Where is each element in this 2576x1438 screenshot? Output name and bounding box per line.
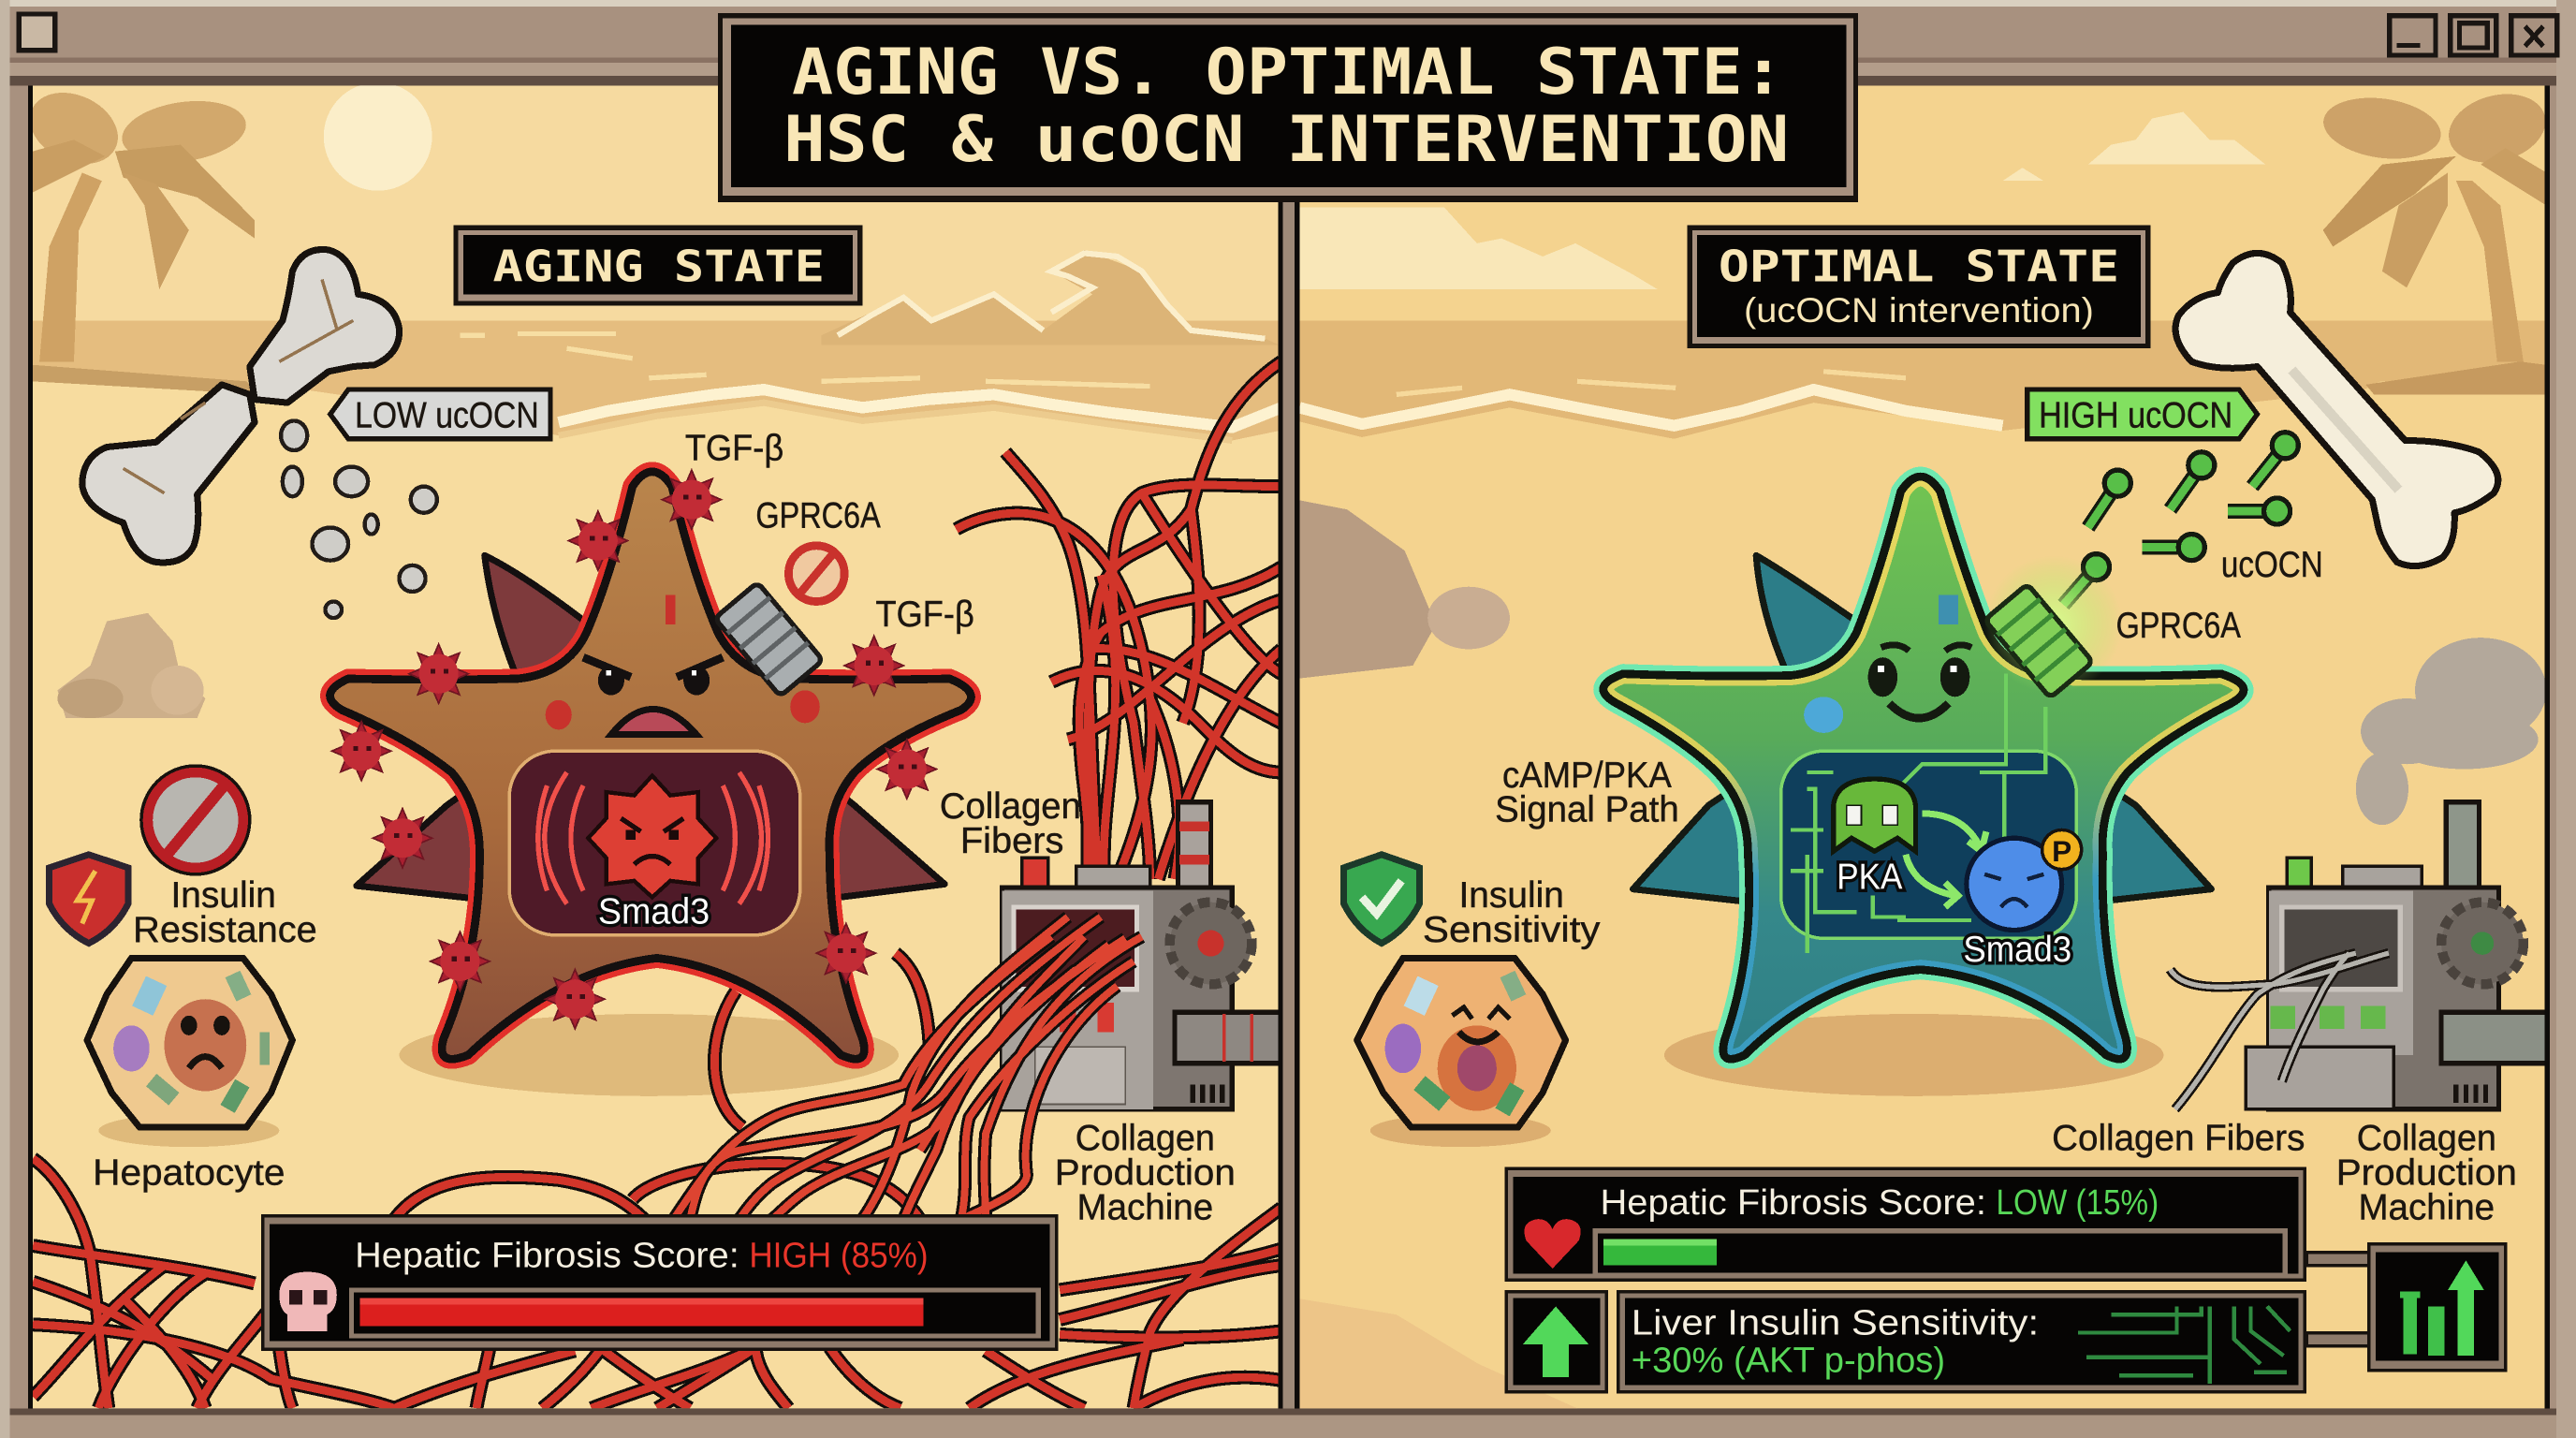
label: cAMP/PKA signal path [1495, 756, 1679, 830]
label: collagen fibers: Fibers [960, 821, 1063, 861]
window buttons: minimize maximize close [2387, 13, 2559, 58]
label: insulin resistance: Insulin [171, 875, 276, 916]
label: insulin sensitivity: Insulin [1459, 875, 1564, 916]
label: Smad3: Smad3 [1963, 930, 2071, 970]
cell: optimal stellate cell [1603, 477, 2244, 1059]
body [330, 472, 971, 1059]
icon: bone debris [281, 420, 437, 618]
label: cAMP/PKA signal path: Signal Path [1495, 790, 1679, 830]
panel: liver insulin sensitivity [1617, 1290, 2306, 1393]
signal waves [538, 772, 768, 903]
back arms [1633, 555, 2211, 903]
receptor: active GPRC6A [1984, 555, 2123, 697]
label: collagen production machine: Machine [2358, 1187, 2495, 1227]
background: sky, clouds, sea and sand [1296, 85, 2546, 1408]
icon: skull [279, 1272, 337, 1331]
tag: low ucOCN [330, 389, 550, 439]
icon: happy hepatocyte [1357, 958, 1566, 1147]
label: GPRC6A: GPRC6A [755, 496, 881, 536]
label: hepatocyte: Hepatocyte [93, 1153, 285, 1194]
back arms [357, 555, 944, 901]
icon: sad hepatocyte [87, 958, 292, 1147]
icon: palm tree [2320, 84, 2554, 394]
label: collagen fibers: Collagen [940, 786, 1081, 827]
icon: no sign on receptor [788, 546, 844, 602]
score panel: hepatic fibrosis low [1505, 1167, 2306, 1282]
label: GPRC6A: GPRC6A [2116, 606, 2241, 646]
title box: AGING VS. OPTIMAL STATE: [792, 35, 1784, 109]
score panel: hepatic fibrosis high [261, 1214, 1058, 1351]
angry face [583, 657, 723, 735]
machine: collagen production, optimal [2246, 802, 2556, 1109]
icon: insulin blocked [141, 766, 250, 874]
result box: rising indicators [2367, 1242, 2507, 1372]
score text: Hepatic Fibrosis Score: LOW (15%) [1600, 1182, 2159, 1222]
heading: optimal state: OPTIMAL STATE [1719, 241, 2119, 291]
TGF-beta particles [332, 470, 936, 1029]
icon: rock [57, 613, 205, 718]
panel: optimal state [1296, 84, 2556, 1408]
label: collagen production machine [1058, 1123, 1234, 1221]
label: insulin sensitivity [1423, 875, 1601, 950]
title box: HSC & ucOCN INTERVENTION [783, 102, 1789, 176]
happy face [1804, 594, 1971, 733]
connectors to result box [2306, 1253, 2369, 1346]
cell spots [546, 594, 820, 729]
body outer glow [330, 472, 971, 1059]
receptor: blocked GPRC6A [715, 582, 823, 697]
tag: high ucOCN: HIGH ucOCN [2039, 395, 2232, 435]
PKA ghost [1834, 779, 1915, 851]
score text: Hepatic Fibrosis Score: HIGH (85%) [355, 1235, 929, 1274]
label: insulin resistance: Resistance [133, 910, 317, 950]
heading: optimal state [1687, 226, 2150, 348]
body inner edge band [1603, 477, 2244, 1059]
machine: collagen production, aging [1003, 802, 1290, 1109]
label: TGF-beta right: TGF-β [875, 594, 974, 635]
label: collagen production machine: Collagen [1076, 1119, 1215, 1159]
label: TGF-beta top: TGF-β [685, 429, 783, 469]
heading: aging state [453, 226, 862, 306]
panel: liver insulin sensitivity: Liver Insulin Sensitivity: [1632, 1302, 2039, 1342]
body [1603, 477, 2244, 1059]
circuit lines [1791, 674, 2045, 953]
P phosphate badge: P [2052, 834, 2071, 868]
circuit decoration [2078, 1306, 2291, 1384]
label: collagen production machine: Collagen [2357, 1119, 2496, 1159]
label: collagen production machine: Production [1055, 1153, 1236, 1194]
label: PKA: PKA [1837, 858, 1903, 898]
body glow [1603, 477, 2244, 1059]
nucleus chamber [509, 751, 800, 935]
nucleus chamber with signal path [1781, 751, 2076, 938]
label: insulin sensitivity: Sensitivity [1423, 910, 1601, 950]
P phosphate badge [2042, 829, 2082, 870]
label: collagen production machine [2336, 1119, 2517, 1227]
progress bar [352, 1290, 1038, 1336]
icon box: up arrow [1505, 1290, 1608, 1393]
window button: left menu [17, 11, 57, 52]
label: collagen production machine: Production [2336, 1153, 2517, 1194]
gray collagen fibers [2170, 953, 2389, 1109]
icon: palm tree [33, 93, 255, 391]
label: collagen fibers: Collagen Fibers [2052, 1119, 2305, 1159]
background: sky, sea and sand [31, 82, 1281, 1408]
panel: liver insulin sensitivity: +30% (AKT p-phos) [1632, 1341, 1945, 1380]
label: cAMP/PKA signal path: cAMP/PKA [1502, 756, 1672, 796]
icon: smoke cloud [2356, 638, 2546, 825]
collagen fibers behind cell [33, 361, 1281, 1408]
icon: rocks [1296, 500, 1510, 679]
body outline [1603, 477, 2244, 1059]
label: collagen production machine: Machine [1076, 1187, 1213, 1227]
icon: ucOCN keys [2063, 433, 2298, 605]
label: collagen fibers [942, 791, 1079, 854]
icon: healthy bone [2175, 253, 2498, 566]
icon: heart [1524, 1219, 1581, 1269]
collagen fiber bundle from machine [674, 917, 1142, 1219]
icon: check shield [1344, 855, 1419, 944]
label: insulin resistance [136, 880, 316, 943]
Smad3 calm blob [1967, 838, 2062, 931]
smad3 angry blob [588, 776, 716, 897]
cell: aging stellate cell [330, 472, 971, 1059]
icon: broken bone [82, 250, 400, 563]
progress bar [1595, 1231, 2285, 1275]
arrows PKA to Smad3 [1906, 814, 1986, 907]
heading: aging state: AGING STATE [493, 241, 825, 291]
title box [718, 13, 1858, 202]
icon: broken shield [50, 855, 128, 944]
tag: low ucOCN: LOW ucOCN [355, 395, 539, 435]
cell: aging stellate cell: Smad3 [598, 892, 710, 932]
label: ucOCN: ucOCN [2221, 545, 2323, 585]
panel: aging state [19, 79, 1290, 1408]
heading: optimal state: (ucOCN intervention) [1744, 291, 2094, 330]
